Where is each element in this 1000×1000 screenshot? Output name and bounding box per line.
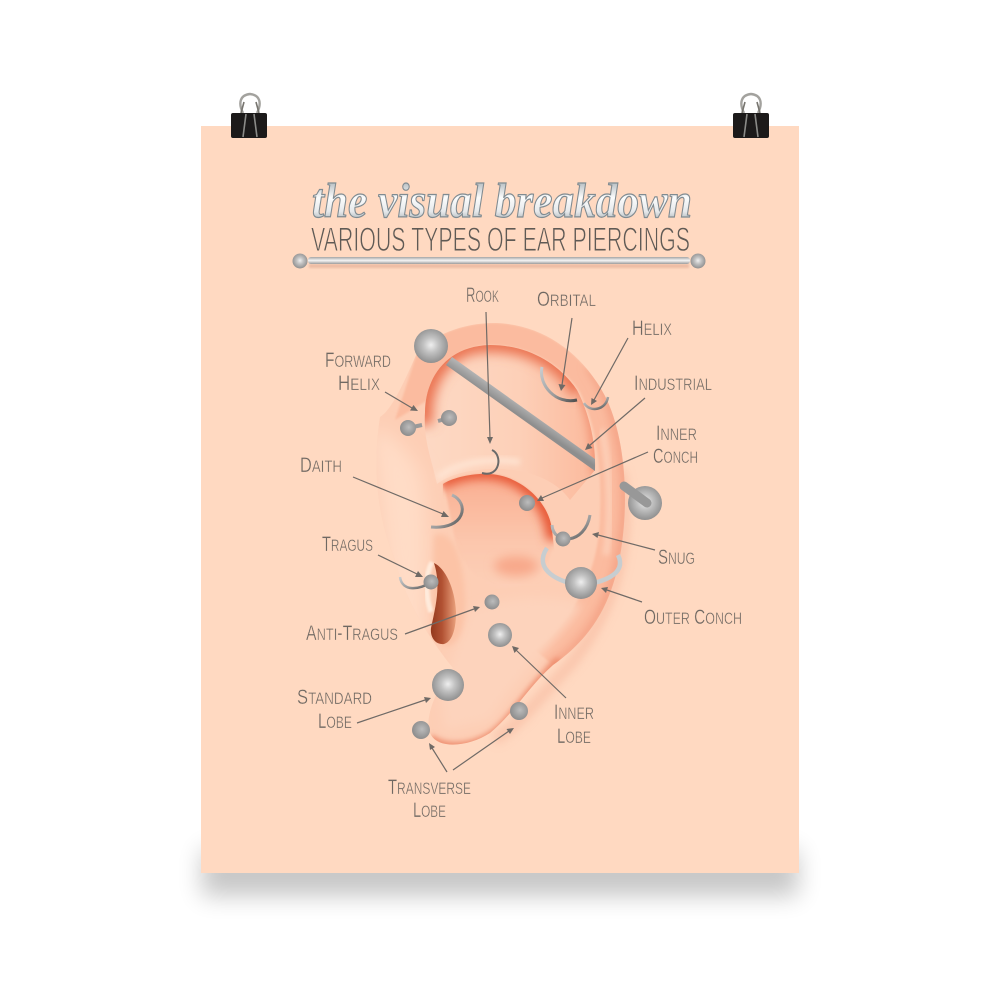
antihelix ridge [438,461,520,478]
label: Inner Conch [653,422,698,468]
tragus highlight [427,562,432,612]
label: Tragus: TRAGUS [322,533,373,556]
helix highlight [602,430,609,555]
concha [444,473,546,540]
tragus piercing [400,574,438,590]
label: Forward Helix [325,349,391,395]
label: Transverse Lobe [388,776,471,822]
lobe rim shade [430,660,560,746]
poster background [201,126,799,873]
label: Inner Lobe: LOBE [557,725,591,748]
daith ring [431,495,462,527]
orbital ring [541,367,577,401]
face blend [376,434,426,626]
inner conch stud [519,495,535,511]
label: Inner Lobe [554,701,594,748]
anti-tragus stud [484,594,500,610]
pointer arrows [353,312,655,772]
label: Helix: HELIX [632,317,672,340]
label: Inner Lobe: INNER [554,701,594,724]
label: Inner Conch: INNER [656,422,697,445]
helix ring [584,397,608,409]
rook ring [482,450,498,474]
scapha [425,345,595,500]
outer conch piercing [543,548,620,599]
binder clip right [733,94,769,138]
ear base [379,323,625,745]
label: Anti-Tragus: ANTI-TRAGUS [306,622,398,645]
binder clip left [231,94,267,138]
scapha shadow [424,343,580,425]
scapha right shadow [582,392,597,475]
label: Outer Conch: OUTER CONCH [644,606,742,629]
label: Standard Lobe: STANDARD [297,686,372,709]
ear illustration [379,323,632,745]
label: Inner Conch: CONCH [653,445,698,468]
subtitle: VARIOUS TYPES OF EAR PIERCINGS [311,221,690,259]
label: Rook: ROOK [466,284,499,307]
poster shadow [202,850,798,896]
lower concha shade [494,556,538,576]
canal surround [432,534,465,646]
label: Standard Lobe [297,686,372,733]
label: Transverse Lobe: TRANSVERSE [388,776,471,799]
forward helix studs [400,410,457,436]
lobe [534,602,581,656]
helix band [395,323,625,665]
label: Forward Helix: FORWARD [325,349,391,372]
concha shadow [440,471,555,540]
ear canal [431,563,456,644]
label: Forward Helix: HELIX [338,372,380,395]
label: Industrial: INDUSTRIAL [634,372,712,395]
label: Snug: SNUG [658,546,695,569]
inner lobe stud [488,623,512,647]
snug piercing [552,515,590,546]
standard lobe stud [432,669,464,701]
label: Orbital: ORBITAL [537,288,596,311]
label: Standard Lobe: LOBE [318,710,352,733]
label: Daith: DAITH [300,454,342,477]
label: Transverse Lobe: LOBE [413,799,446,822]
ear cast shadow [495,470,625,740]
helix rim shade [550,365,626,670]
labels [297,284,742,822]
transverse lobe studs [412,702,528,739]
title: script: the visual breakdown [312,173,692,228]
title barbell [292,254,706,268]
industrial piercing [414,329,662,520]
